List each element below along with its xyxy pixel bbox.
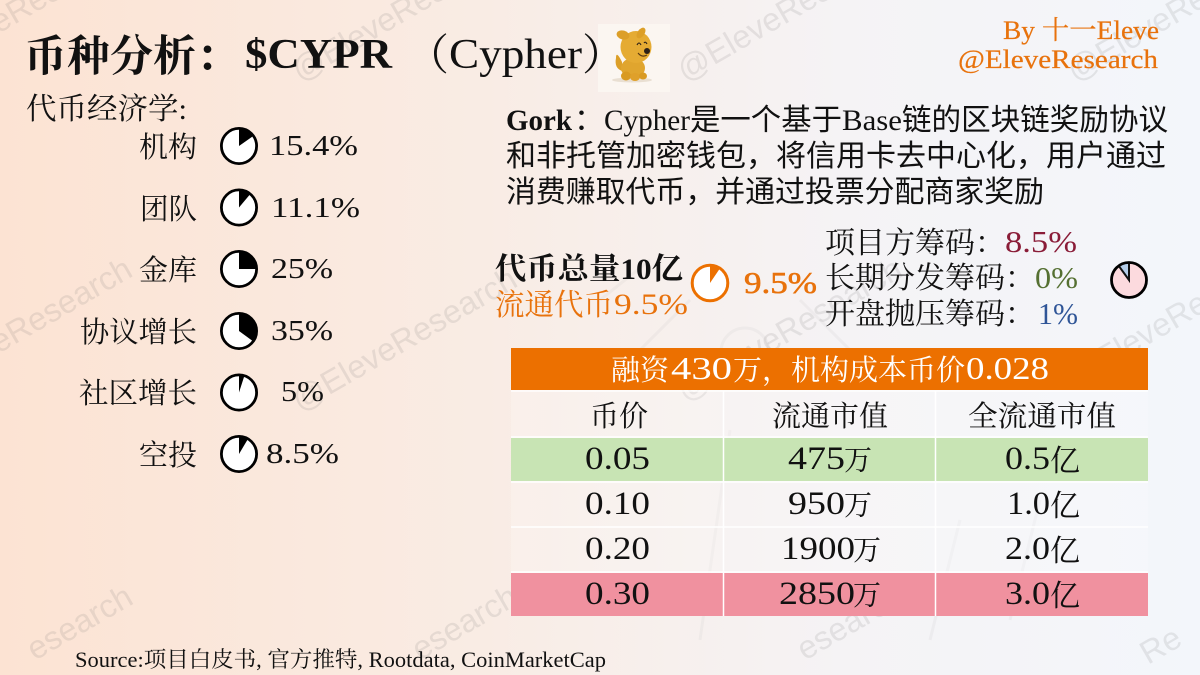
source note: Source:项目白皮书, 官方推特, Rootdata, CoinMarketCap <box>75 647 606 672</box>
row 0.10: 1.0 <box>1007 486 1050 522</box>
row: team 11.1%: 11.1% <box>271 193 360 224</box>
title: （ <box>406 22 449 83</box>
text: esearch <box>405 578 524 667</box>
value: circulating: 9.5% <box>744 265 817 300</box>
project description: ： <box>574 95 604 139</box>
row: airdrop 8.5%: 空投 <box>139 439 197 472</box>
row 0.20: 2.0 <box>1005 531 1050 567</box>
table title <box>511 348 1148 390</box>
tokenomics heading: 代币经济学: <box>26 93 187 126</box>
token supply text: 代币总量10亿 <box>495 253 683 286</box>
row: community growth 5%: 5% <box>281 377 324 408</box>
row 0.10: 0.10 <box>585 486 650 522</box>
row 0.20: 万 <box>853 535 881 567</box>
text: esearch <box>20 578 138 667</box>
project description: 和非托管加密钱包，将信用卡去中心化，用户通过 <box>506 131 1166 175</box>
row 0.05: 万 <box>844 445 872 477</box>
row 0.10: 万 <box>844 490 872 522</box>
title: 币种分析： <box>24 33 239 81</box>
panel: tokenomics <box>26 93 360 472</box>
chips: project: 项目方筹码： <box>825 218 1005 262</box>
project description: 消费赚取代币，并通过投票分配商家奖励 <box>506 167 1044 211</box>
row 0.30 <box>585 576 1080 613</box>
row 0.05: 0.05 <box>585 441 650 477</box>
row 0.05 <box>585 441 1080 478</box>
pie: chip split <box>1112 262 1146 298</box>
chips: project: 8.5% <box>1005 224 1077 259</box>
text: @EleveResearch <box>670 250 908 408</box>
table header: 全流通市值 <box>968 400 1116 433</box>
chips: opening sell pressure: 开盘抛压筹码： <box>825 289 1035 333</box>
table title: 430 <box>671 350 732 386</box>
row 0.30: 万 <box>853 580 881 612</box>
table header: 币价 <box>590 400 648 433</box>
row 0.05: 475 <box>788 441 845 477</box>
row: treasury 25%: 25% <box>271 254 333 285</box>
row 0.20: 亿 <box>1050 535 1080 568</box>
row 0.30: 3.0 <box>1005 576 1050 612</box>
circulating supply text: 流通代币 <box>495 289 613 322</box>
table cell backgrounds <box>511 391 1148 616</box>
row: airdrop 8.5%: 8.5% <box>266 439 339 470</box>
title: Cypher <box>449 32 582 78</box>
row: treasury 25%: 金库 <box>139 254 197 287</box>
row: community growth 5% <box>79 375 324 410</box>
circulating supply text <box>495 288 688 322</box>
row: team 11.1% <box>140 190 360 226</box>
row: institutions 15.4%: 机构 <box>139 131 197 164</box>
valuation table <box>511 348 1148 616</box>
project description <box>506 95 1168 211</box>
row: institutions 15.4% <box>139 128 358 164</box>
row: airdrop 8.5% <box>139 436 339 472</box>
text: @EleveResearch <box>286 260 523 418</box>
row: institutions 15.4%: 15.4% <box>269 131 358 162</box>
chips: long-term vesting: 长期分发筹码： <box>825 253 1035 297</box>
text: Re <box>1134 619 1187 671</box>
title: $CYPR <box>245 32 393 78</box>
project description: 是一个基于 <box>690 104 842 137</box>
row 0.30: 亿 <box>1050 580 1080 613</box>
chips: opening sell pressure: 1% <box>1038 296 1078 331</box>
icon: yellow puppy <box>598 24 670 92</box>
row: protocol growth 35% <box>80 313 333 349</box>
pie: circulating 9.5% <box>692 265 728 301</box>
row: protocol growth 35%: 协议增长 <box>80 316 197 349</box>
table title: 0.028 <box>966 350 1049 386</box>
row 0.30: 0.30 <box>585 576 650 612</box>
title: ） <box>582 22 625 83</box>
row 0.10 <box>585 486 1080 523</box>
row: treasury 25% <box>139 251 333 287</box>
table header: 流通市值 <box>772 400 888 433</box>
project description: Cypher <box>604 104 690 137</box>
row 0.20 <box>585 531 1080 568</box>
row 0.05: 亿 <box>1050 445 1080 478</box>
row 0.20: 1900 <box>781 531 855 567</box>
chips: long-term vesting: 0% <box>1035 260 1078 295</box>
row 0.05: 0.5 <box>1005 441 1050 477</box>
table header <box>590 400 1116 433</box>
table title: 万，机构成本币价 <box>733 348 965 389</box>
project description: Base <box>842 104 902 137</box>
text: esearch <box>790 578 908 667</box>
credit: author <box>958 16 1159 74</box>
row 0.10: 950 <box>788 486 845 522</box>
credit: author: @EleveResearch <box>958 45 1158 74</box>
project description: 链的区块链奖励协议 <box>902 104 1168 137</box>
circulating supply text: 9.5% <box>614 288 688 321</box>
row 0.20: 0.20 <box>585 531 650 567</box>
row 0.30: 2850 <box>779 576 855 612</box>
row 0.10: 亿 <box>1050 490 1080 523</box>
row: team 11.1%: 团队 <box>140 193 197 226</box>
credit: author: By 十一Eleve <box>1003 16 1159 45</box>
title <box>24 22 625 83</box>
row: community growth 5%: 社区增长 <box>79 377 197 410</box>
table title: 融资 <box>611 354 670 387</box>
row: protocol growth 35%: 35% <box>271 316 333 347</box>
project description: Gork <box>506 104 572 137</box>
